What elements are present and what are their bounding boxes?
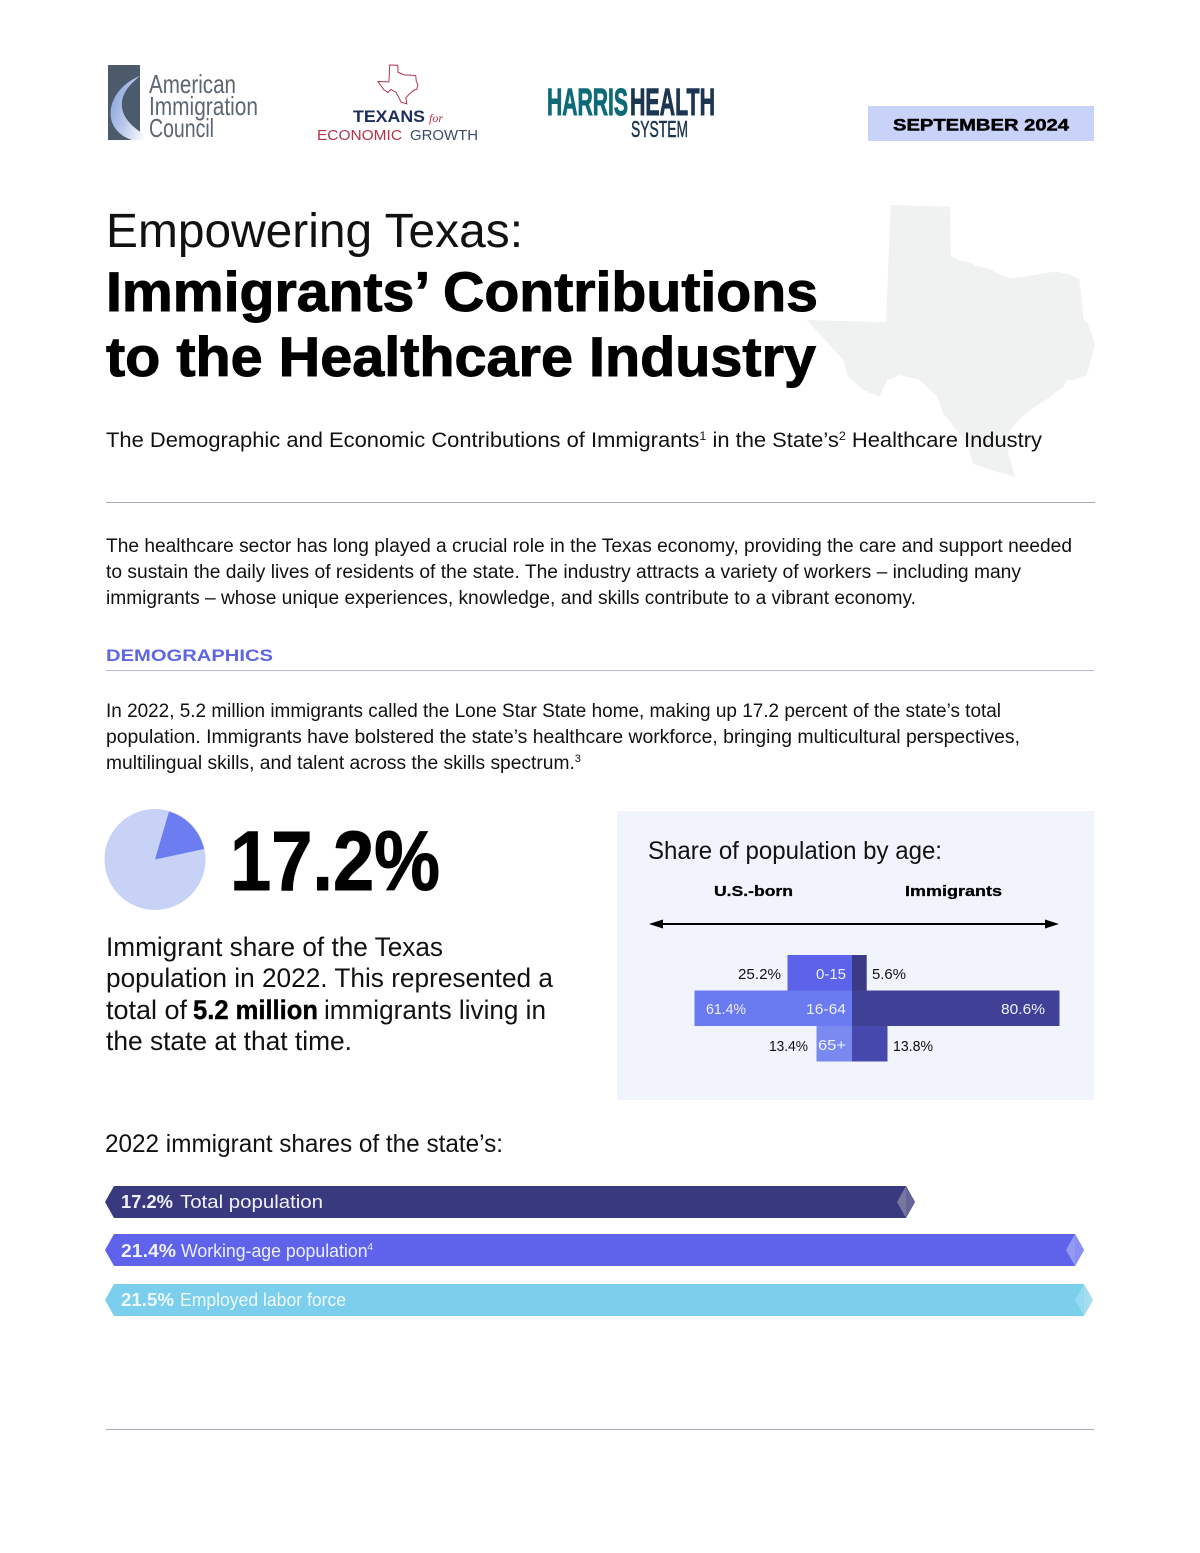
section heading: demographics: DEMOGRAPHICS	[106, 646, 273, 665]
bar: working-age population: 4	[368, 1242, 373, 1253]
column labels: U.S.-born	[714, 883, 793, 900]
stat description: total of	[106, 995, 187, 1025]
stat description: immigrants living in	[324, 995, 546, 1025]
age pyramid chart: 80.6%	[1001, 1001, 1045, 1018]
stat description: 5.2 million	[193, 995, 318, 1025]
intro paragraph: The healthcare sector has long played a crucial role in the Texas economy, providing the care and support needed	[106, 536, 1072, 557]
bar: employed labor force: Employed labor force	[180, 1290, 346, 1310]
logo: Texans for Economic Growth: for	[429, 111, 443, 125]
double-headed arrow	[649, 920, 1059, 928]
subtitle: The Demographic and Economic Contributions of Immigrants	[106, 429, 674, 452]
background: Texas silhouette	[807, 205, 1095, 477]
demographics paragraph: multilingual skills, and talent across the skills spectrum.	[106, 753, 570, 774]
stat description: population in 2022. This represented a	[106, 963, 554, 993]
logo: Harris Health System: HEALTH	[630, 82, 715, 124]
demographics paragraph: In 2022, 5.2 million immigrants called the Lone Star State home, making up 17.2 percent of the state’s total	[106, 701, 1001, 722]
subtitle: Healthcare Industry	[846, 429, 1043, 452]
bar chart heading: 2022 immigrant shares of the state’s:	[105, 1130, 503, 1158]
demographics paragraph: 3	[575, 753, 581, 765]
logo: Harris Health System	[547, 82, 715, 142]
subtitle: 1	[699, 429, 707, 443]
age pyramid chart: 65+	[818, 1037, 846, 1054]
panel: share of population by age	[617, 811, 1094, 1100]
bar: total population: 17.2%	[121, 1192, 173, 1212]
age pyramid chart: 25.2%	[738, 966, 781, 983]
bar: total population	[105, 1186, 915, 1218]
stat description: the state at that time.	[106, 1026, 352, 1056]
demographics paragraph: population. Immigrants have bolstered the state’s healthcare workforce, bringing multicultural perspectives,	[106, 727, 1020, 748]
date tag: SEPTEMBER 2024	[893, 116, 1070, 134]
title: Immigrants’ Contributions	[106, 260, 818, 323]
stat description	[106, 932, 554, 1056]
title	[106, 205, 818, 388]
column labels: Immigrants	[905, 883, 1002, 900]
pie chart: immigrant share	[104, 809, 206, 910]
intro paragraph: to sustain the daily lives of residents of the state. The industry attracts a variety of workers – including many	[106, 562, 1021, 583]
bar: working-age population: Working-age population	[181, 1241, 371, 1261]
bar: working-age population	[105, 1234, 1084, 1266]
logo: Texans for Economic Growth: TEXANS	[353, 108, 425, 126]
logo: Texans for Economic Growth: ECONOMIC	[317, 128, 402, 144]
age pyramid chart	[694, 955, 1060, 1062]
subtitle: 2	[839, 429, 846, 443]
logo: Texans for Economic Growth: GROWTH	[410, 128, 478, 144]
title: to the Healthcare Industry	[106, 325, 816, 388]
intro paragraph: immigrants – whose unique experiences, knowledge, and skills contribute to a vibrant economy.	[106, 588, 916, 609]
bar: total population: Total population	[180, 1192, 323, 1212]
bar: employed labor force: 21.5%	[121, 1290, 174, 1310]
bar: working-age population: 21.4%	[121, 1241, 176, 1261]
logo: Texans for Economic Growth	[317, 65, 478, 144]
column labels	[714, 883, 1002, 900]
logo: American Immigration Council: Council	[149, 113, 214, 143]
logo: Harris Health System: HARRIS	[547, 82, 628, 124]
age pyramid chart: 61.4%	[706, 1001, 746, 1018]
age pyramid chart: 5.6%	[872, 966, 906, 983]
logo: Harris Health System: SYSTEM	[631, 116, 688, 142]
panel heading: Share of population by age:	[648, 837, 942, 865]
logo: American Immigration Council: American	[149, 69, 236, 99]
stat description: Immigrant share of the Texas	[106, 932, 443, 962]
logo: American Immigration Council: Immigration	[149, 91, 258, 121]
age pyramid chart: 16-64	[806, 1001, 846, 1018]
age pyramid chart: 13.8%	[893, 1038, 933, 1055]
bar: employed labor force	[105, 1284, 1093, 1316]
demographics paragraph	[106, 701, 1020, 774]
age pyramid chart: 13.4%	[769, 1038, 808, 1055]
intro paragraph	[106, 536, 1072, 609]
age pyramid chart: 0-15	[816, 966, 846, 983]
big stat: 17.2%: 17.2%	[230, 814, 440, 908]
title: Empowering Texas:	[106, 205, 523, 258]
logo: American Immigration Council	[108, 65, 258, 143]
date tag	[868, 106, 1094, 141]
subtitle: in the State’s	[706, 429, 839, 452]
